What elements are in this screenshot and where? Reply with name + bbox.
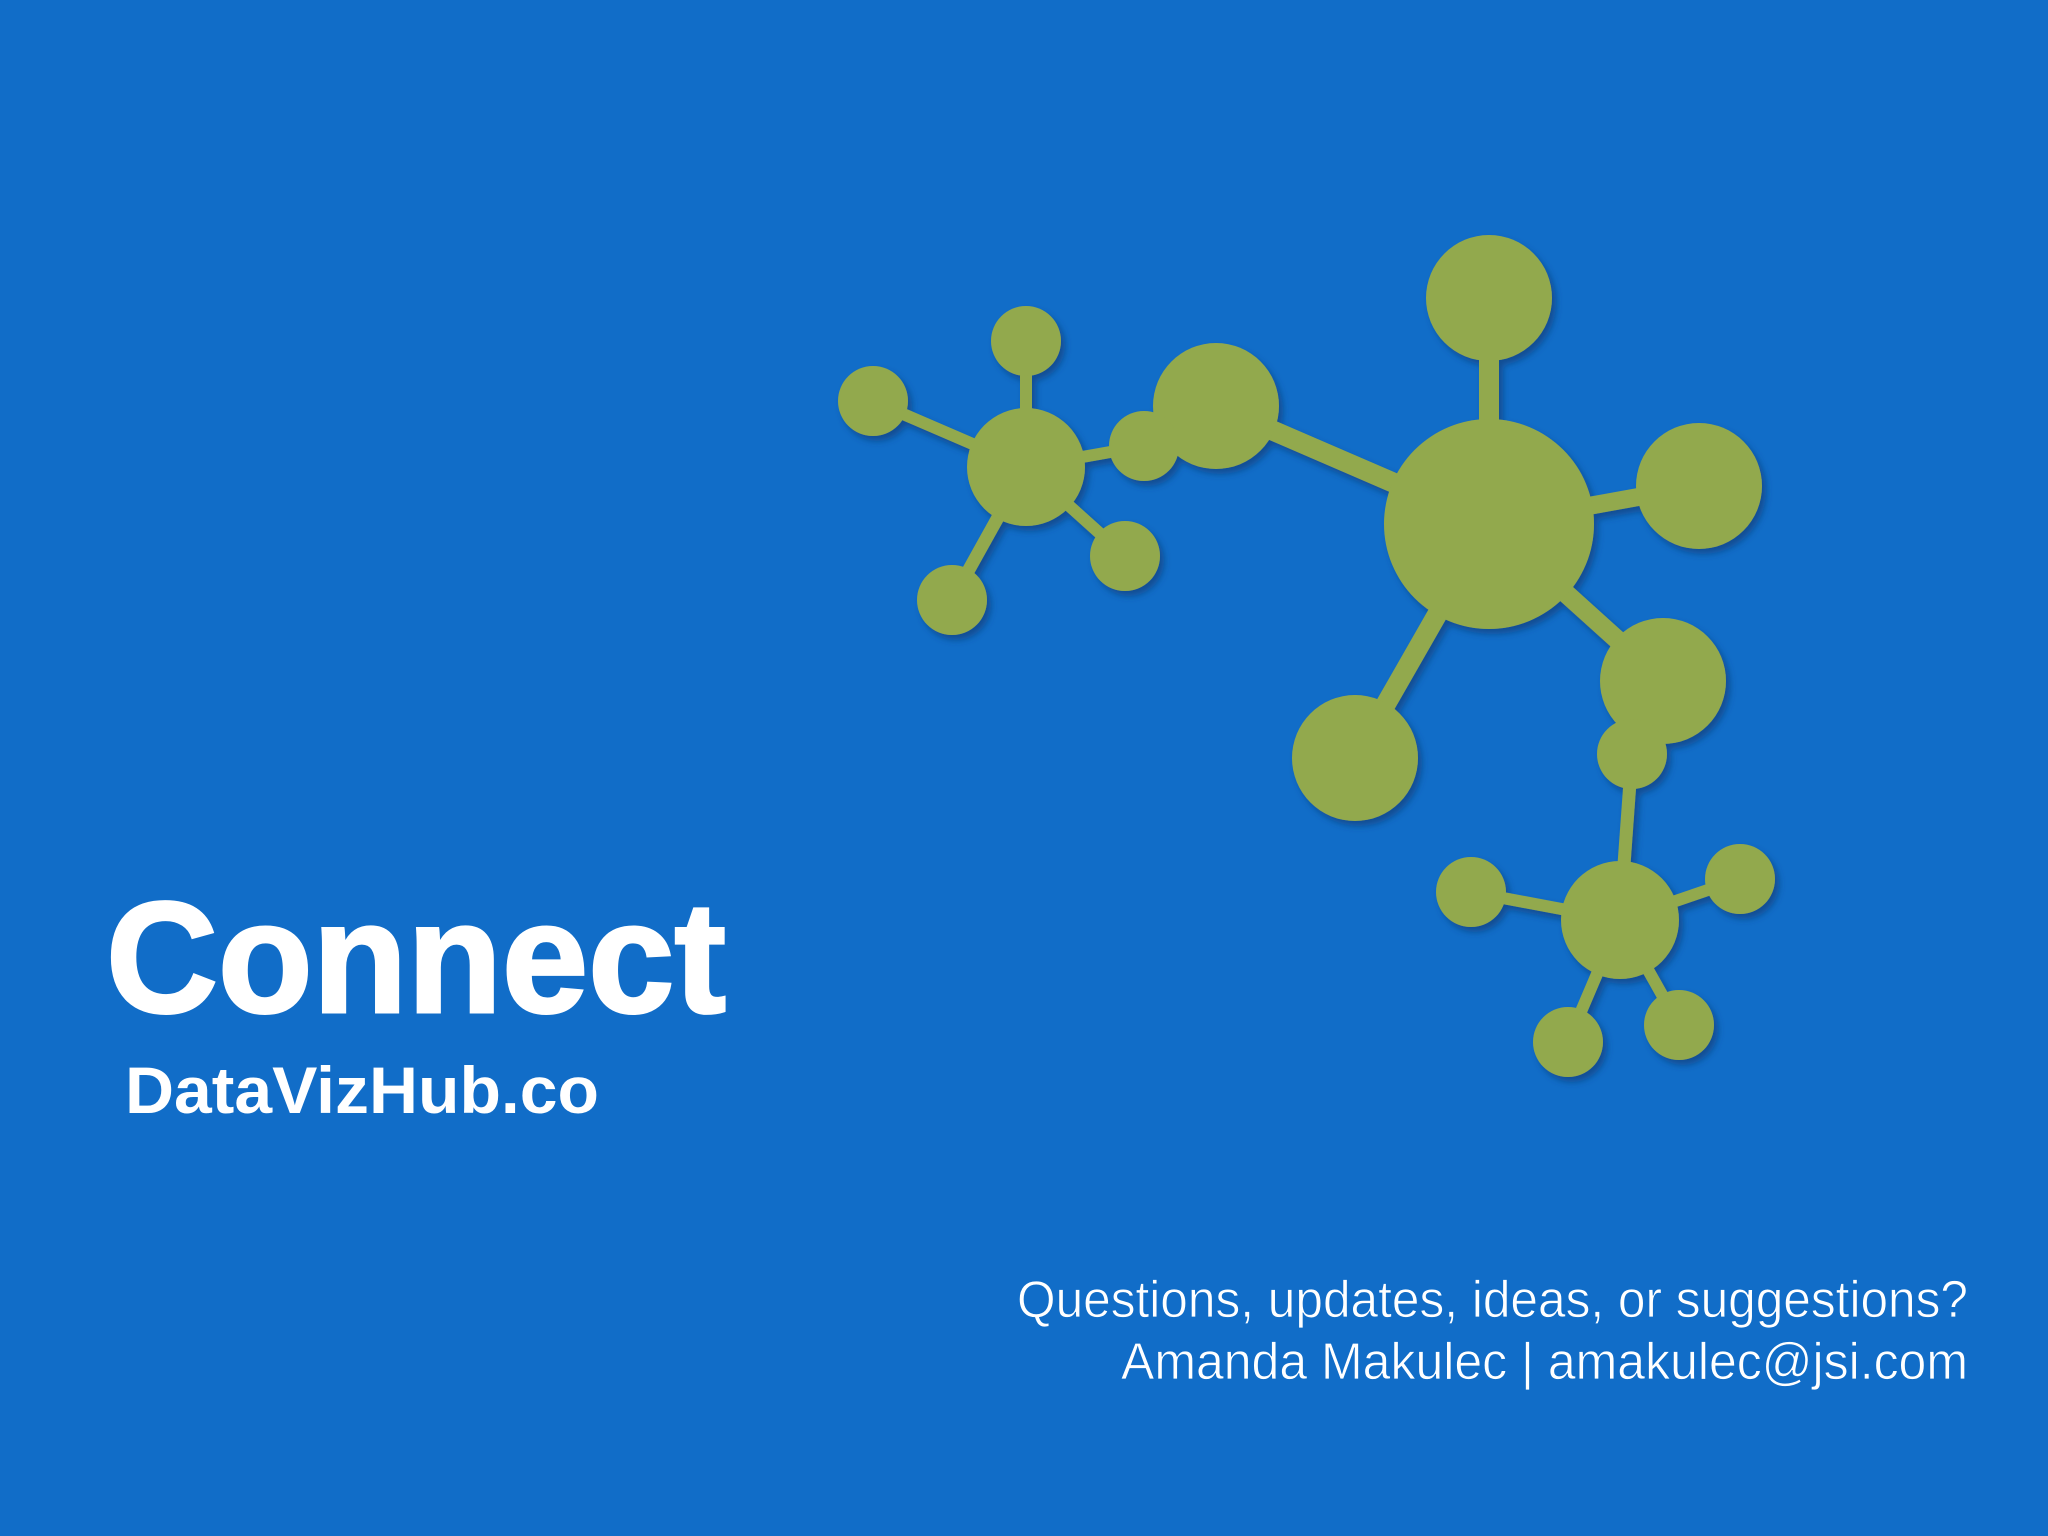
contact question line: Questions, updates, ideas, or suggestions? — [1017, 1271, 1968, 1329]
website link: DataVizHub.co — [125, 1053, 599, 1127]
connector: links between nodes — [873, 298, 1740, 1042]
contact name and email line: Amanda Makulec | amakulec@jsi.com — [1121, 1333, 1968, 1391]
contact text — [1017, 1271, 1968, 1391]
title: Connect — [106, 870, 726, 1046]
nodes: lower right cluster — [1436, 844, 1775, 1077]
icon: molecule network — [838, 235, 1775, 1077]
nodes: central cluster — [1109, 235, 1762, 821]
nodes: left cluster — [838, 306, 1160, 635]
